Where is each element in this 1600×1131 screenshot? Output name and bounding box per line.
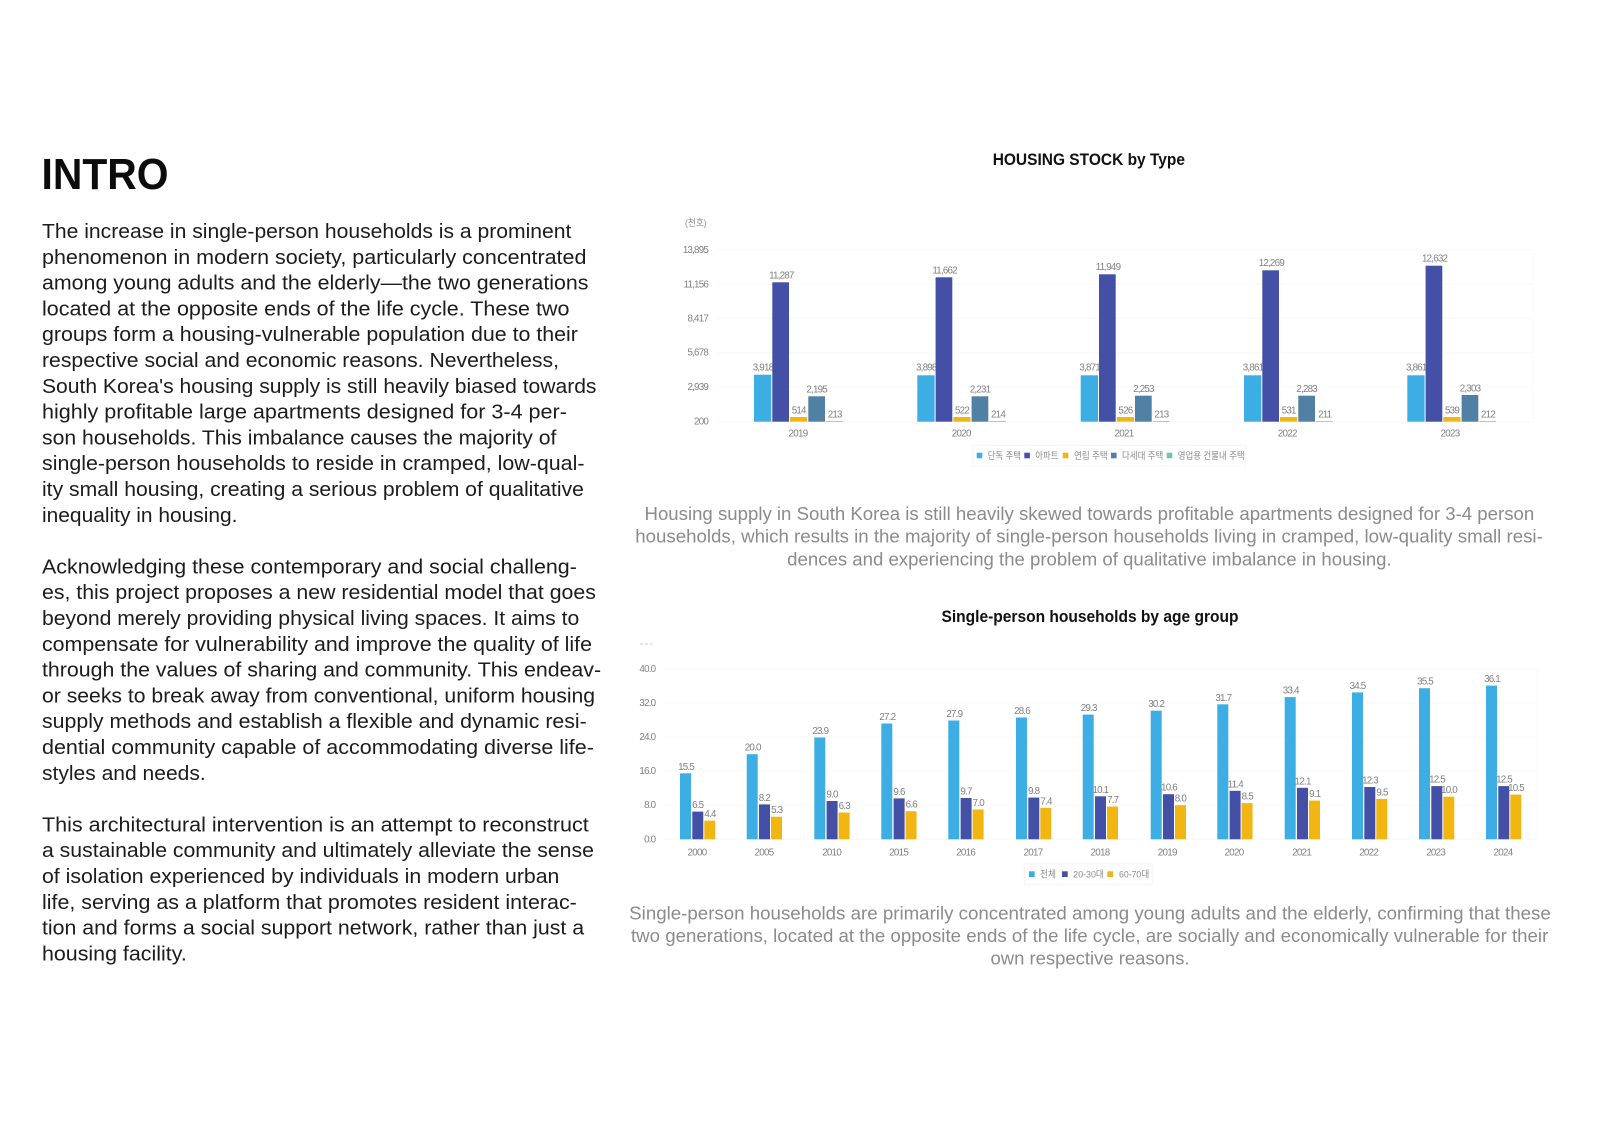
x axis labels: 2022	[1278, 429, 1297, 440]
bars: 2010: 9.0	[826, 790, 839, 800]
x axis labels: 2021	[1292, 847, 1311, 858]
bars: 2019: 213	[828, 409, 843, 420]
text block: intro paragraph 2: Acknowledging these contemporary and social challeng-	[42, 555, 577, 578]
text block: intro paragraph 1: single-person households to reside in cramped, low-qual-	[42, 452, 584, 475]
text block: intro paragraph 3: This architectural intervention is an attempt to reconstruct	[42, 813, 589, 836]
bars: 2020: 31.7	[1215, 693, 1232, 704]
bars: 2016: 27.9	[946, 709, 963, 720]
text block: intro paragraph 1: among young adults and the elderly—the two generations	[42, 272, 588, 295]
text block: intro paragraph 1: phenomenon in modern society, particularly concentrated	[42, 246, 586, 269]
bars: 2017: 7.4	[1040, 796, 1053, 807]
caption: housing supply	[635, 504, 1543, 569]
bars: 2015: 27.2	[879, 712, 896, 723]
bars: 2021: 213	[1154, 409, 1170, 420]
caption: single-person households	[629, 903, 1551, 969]
text block: intro paragraph 1: South Korea's housing supply is still heavily biased towards	[42, 375, 596, 398]
x axis labels	[688, 847, 1514, 858]
y axis labels	[683, 245, 709, 428]
bars: 2020: 214	[991, 409, 1006, 420]
legend: housing types: 아파트	[1035, 451, 1059, 462]
text block: intro paragraph 3: a sustainable community and ultimately alleviate the sense	[42, 839, 594, 862]
bars: 2010	[812, 726, 851, 839]
bars: 2005	[745, 743, 784, 839]
x axis labels: 2018	[1090, 847, 1111, 858]
text block: intro paragraph 2: through the values of sharing and community. This endeav-	[42, 659, 601, 682]
bars: 2024: 36.1	[1484, 674, 1500, 685]
y axis labels: 16.0	[639, 766, 657, 777]
bars: 2000	[678, 762, 717, 839]
legend: age groups: 20-30대	[1073, 870, 1104, 880]
bars: 2010: 6.3	[839, 801, 851, 812]
bars: 2023: 212	[1481, 409, 1495, 420]
bars: 2022	[1350, 681, 1389, 839]
x axis labels: 2010	[822, 847, 842, 858]
bars: 2020: 11,662	[932, 265, 957, 276]
text block: intro paragraph 2: beyond merely providing physical living spaces. It aims to	[42, 607, 579, 630]
text block: intro paragraph 2: es, this project proposes a new residential model that goes	[42, 581, 596, 604]
text block: intro paragraph 2: supply methods and establish a flexible and dynamic resi-	[42, 710, 587, 733]
text block: intro paragraph 3: of isolation experienced by individuals in modern urban	[42, 865, 559, 888]
bars: 2018: 29.3	[1081, 703, 1098, 714]
bars: 2019: 2,195	[806, 384, 828, 395]
text block: intro paragraph 3: tion and forms a social support network, rather than just a	[42, 917, 585, 940]
bars: 2019: 30.2	[1148, 699, 1164, 710]
bars: 2023: 10.0	[1441, 785, 1458, 796]
bars: 2020: 8.5	[1242, 792, 1254, 803]
bars: 2000: 4.4	[704, 809, 717, 820]
y axis labels: 5,678	[687, 348, 709, 359]
bars: 2005: 8.2	[759, 793, 770, 804]
bars: 2020	[916, 265, 1006, 422]
bars: 2022: 211	[1318, 409, 1332, 420]
text block: intro paragraph 1: The increase in single-person households is a prominent	[42, 220, 572, 243]
bars: 2020: 3,898	[916, 363, 938, 374]
x axis labels: 2017	[1024, 847, 1043, 858]
bars: 2018: 10.1	[1092, 785, 1109, 796]
bars: 2022: 9.5	[1376, 787, 1389, 798]
y axis labels: 40.0	[639, 664, 657, 675]
text block: intro paragraph 1: son households. This imbalance causes the majority of	[42, 426, 557, 449]
heading: housing stock chart: HOUSING STOCK by Type	[993, 151, 1185, 169]
bars: 2015	[879, 712, 918, 839]
y axis labels: 8.0	[644, 800, 657, 811]
text block: intro paragraph 2: or seeks to break away from conventional, uniform housing	[42, 684, 595, 707]
y axis labels: 13,895	[683, 245, 709, 256]
legend: age groups: 전체	[1040, 870, 1056, 880]
bars: 2021: 526	[1118, 405, 1134, 416]
x axis labels: 2019	[788, 429, 808, 440]
text block: intro paragraph 3: housing facility.	[42, 942, 187, 965]
x axis labels: 2022	[1359, 847, 1378, 858]
bars: 2021: 3,871	[1079, 363, 1100, 374]
text block: intro paragraph 1	[42, 220, 596, 527]
bars: 2019: 8.0	[1175, 794, 1187, 805]
legend: housing types: 다세대 주택	[1122, 451, 1163, 462]
bars: 2016: 9.7	[960, 786, 972, 798]
text block: intro paragraph 1: located at the opposite ends of the life cycle. These two	[42, 297, 569, 320]
bars: 2022: 531	[1282, 405, 1296, 416]
text block: intro paragraph 2: styles and needs.	[42, 762, 206, 785]
bars: 2019: 514	[792, 405, 807, 416]
caption: housing supply: households, which results in the majority of single-person households living in cramped, low-quality small resi-	[635, 527, 1543, 547]
legend: housing types: 단독 주택	[988, 451, 1021, 462]
text block: intro paragraph 1: highly profitable large apartments designed for 3-4 per-	[42, 401, 567, 424]
bars: 2023: 539	[1445, 405, 1459, 416]
bar chart: single-person households by age group	[639, 644, 1538, 884]
caption: housing supply: dences and experiencing the problem of qualitative imbalance in housing.	[787, 549, 1392, 569]
x axis labels: 2021	[1114, 429, 1134, 440]
caption: single-person households: two generations, located at the opposite ends of the life cycle, are socially and economically vulnerable for their	[631, 926, 1548, 946]
bars: 2000: 15.5	[678, 762, 695, 773]
bars: 2023: 12,632	[1422, 254, 1448, 264]
bars: 2023: 35.5	[1417, 677, 1434, 688]
caption: housing supply: Housing supply in South Korea is still heavily skewed towards profitable apartments designed for 3-4 person	[644, 504, 1534, 524]
text block: intro paragraph 2: dential community capable of accommodating diverse life-	[42, 736, 594, 759]
legend: housing types	[972, 445, 1246, 466]
bars: 2022: 34.5	[1350, 681, 1367, 692]
bars: 2020: 522	[955, 405, 969, 416]
x axis labels: 2016	[956, 847, 976, 858]
legend: age groups	[1024, 864, 1152, 884]
y axis labels: 11,156	[684, 279, 709, 290]
text block: intro paragraph 1: ity small housing, creating a serious problem of qualitative	[42, 478, 584, 501]
bars: 2024: 10.5	[1508, 783, 1525, 794]
text block: intro paragraph 1: groups form a housing-vulnerable population due to their	[42, 323, 578, 346]
text block: intro paragraph 2: compensate for vulnerability and improve the quality of life	[42, 633, 592, 656]
bars: 2020: 2,231	[970, 384, 991, 395]
text block: intro paragraph 2	[42, 555, 601, 785]
bars: 2021: 9.1	[1309, 789, 1321, 800]
x axis labels: 2023	[1440, 429, 1461, 440]
bars: 2023: 3,861	[1406, 363, 1427, 374]
x axis labels: 2024	[1494, 847, 1514, 858]
bars: 2020: 11.4	[1228, 779, 1244, 790]
bars: 2016: 7.0	[973, 798, 985, 809]
y axis labels: 8,417	[687, 313, 708, 324]
bars: 2019	[753, 270, 843, 422]
bars: 2022: 2,283	[1296, 384, 1318, 395]
bar chart: housing stock by type	[683, 218, 1533, 466]
bars: 2019: 3,918	[753, 363, 775, 374]
bars: 2017	[1014, 706, 1053, 839]
bars: 2015: 6.6	[906, 800, 918, 811]
bars: 2022: 3,861	[1243, 363, 1264, 374]
bars: 2022: 12,269	[1259, 258, 1284, 269]
x axis labels: 2023	[1426, 847, 1446, 858]
x axis labels	[788, 429, 1461, 440]
heading: single-person households chart: Single-person households by age group	[942, 608, 1238, 626]
bars: 2016	[946, 709, 985, 839]
x axis labels: 2005	[754, 847, 775, 858]
legend: housing types: 영업용 건물내 주택	[1178, 450, 1245, 462]
bars: 2022	[1243, 258, 1333, 422]
bars: 2024: 12.5	[1496, 775, 1513, 786]
caption: single-person households: own respective reasons.	[990, 949, 1190, 969]
bars: 2005: 5.3	[771, 805, 784, 816]
text block: intro paragraph 1: respective social and economic reasons. Nevertheless,	[42, 349, 559, 372]
caption: single-person households: Single-person households are primarily concentrated among young adults and the elderly, confirming that these	[629, 903, 1551, 923]
bars: 2023: 12.5	[1429, 775, 1446, 786]
y axis labels: 32.0	[639, 698, 657, 709]
text block: intro paragraph 1: inequality in housing.	[42, 504, 238, 527]
text block: intro paragraph 3: life, serving as a platform that promotes resident interac-	[42, 891, 577, 914]
y axis labels: 2,939	[687, 382, 708, 393]
y axis labels: 24.0	[639, 732, 657, 743]
bars: 2018	[1081, 703, 1119, 839]
bars: 2017: 28.6	[1014, 706, 1031, 717]
bars: 2021	[1079, 262, 1170, 422]
text block: intro paragraph 3	[42, 813, 594, 965]
bars: 2010: 23.9	[812, 726, 829, 737]
bars: 2018: 7.7	[1107, 795, 1119, 806]
y axis labels	[639, 664, 657, 845]
bars: 2000: 6.5	[692, 800, 705, 811]
bars: 2023: 2,303	[1460, 384, 1482, 394]
x axis labels: 2020	[1224, 847, 1245, 858]
y axis labels: 200	[694, 417, 709, 428]
bars: 2023	[1417, 677, 1458, 839]
bars: 2021: 33.4	[1283, 686, 1300, 697]
legend: age groups: 60-70대	[1119, 870, 1149, 880]
bars: 2017: 9.8	[1028, 786, 1041, 797]
bars: 2005: 20.0	[745, 743, 762, 754]
bars: 2024	[1484, 674, 1525, 839]
x axis labels: 2019	[1158, 847, 1177, 858]
bars: 2020	[1215, 693, 1254, 839]
bars: 2015: 9.6	[893, 787, 906, 798]
bars: 2019: 10.6	[1161, 783, 1178, 794]
bars: 2019	[1148, 699, 1187, 839]
x axis labels: 2015	[889, 847, 909, 858]
bars: 2019: 11,287	[769, 270, 794, 281]
bars: 2021: 2,253	[1133, 384, 1155, 395]
chart unit label: (천호)	[685, 218, 707, 229]
bars: 2021: 12.1	[1295, 776, 1311, 787]
title: INTRO: INTRO	[42, 150, 168, 199]
x axis labels: 2000	[688, 847, 708, 858]
bars: 2021	[1283, 686, 1321, 839]
y axis labels: 0.0	[644, 834, 657, 845]
x axis labels: 2020	[952, 429, 972, 440]
bars: 2022: 12.3	[1362, 776, 1379, 786]
bars: 2023	[1406, 254, 1496, 422]
legend: housing types: 연립 주택	[1074, 450, 1108, 462]
bars: 2021: 11,949	[1096, 262, 1121, 273]
